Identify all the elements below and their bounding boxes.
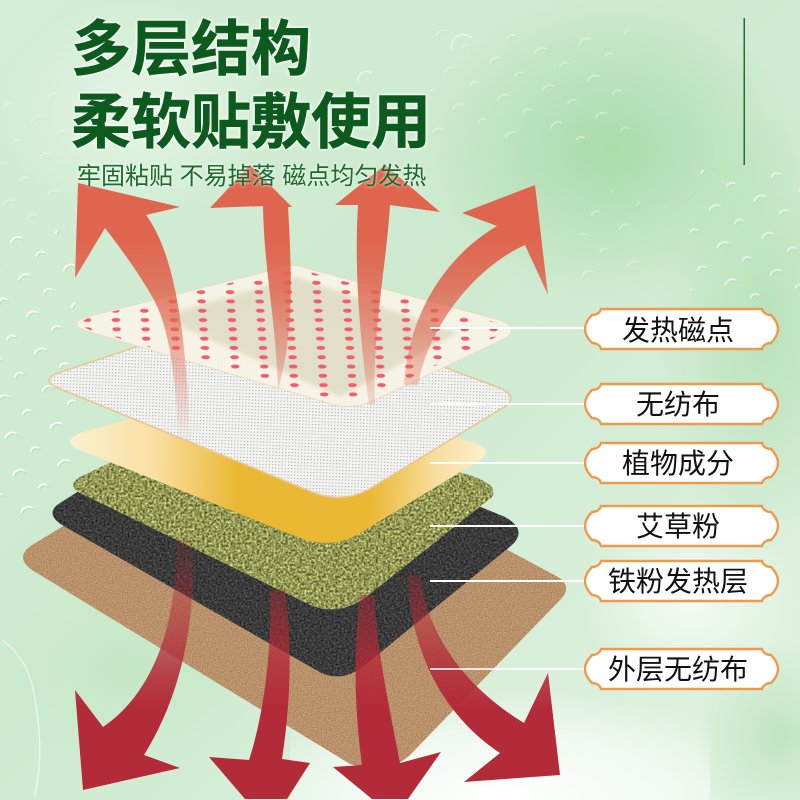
label: mugwort powder — [585, 506, 778, 546]
label: non-woven — [585, 384, 778, 424]
arrow: heat up-left — [75, 183, 190, 440]
leader lines — [430, 327, 586, 670]
title line 2: 柔软贴敷使用 — [71, 89, 431, 156]
layer: plant ingredients (yellow) — [70, 385, 486, 543]
layer: non-woven (white weave) — [49, 300, 511, 498]
arrow: heat up-right — [404, 185, 548, 385]
label: non-woven: 无纺布 — [636, 389, 720, 420]
layer: iron powder (black) — [52, 465, 519, 676]
label: iron heating layer: 铁粉发热层 — [608, 566, 748, 597]
layer: outer non-woven (brown) — [23, 412, 566, 768]
label: plant ingredients: 植物成分 — [622, 448, 734, 479]
label: outer non-woven — [585, 649, 778, 689]
label: plant ingredients — [585, 443, 778, 483]
layer: magnetic heat dots — [76, 266, 512, 407]
label: magnetic dots: 发热磁点 — [622, 315, 734, 346]
subtitle: 牢固粘贴 不易掉落 磁点均匀发热 — [77, 163, 426, 190]
label: iron heating layer — [585, 561, 778, 601]
title line 1: 多层结构 — [71, 16, 311, 83]
label: outer non-woven: 外层无纺布 — [608, 654, 748, 685]
vertical divider — [744, 18, 745, 165]
arrow: heat down centre-left — [209, 590, 310, 799]
arrow: heat up centre-left — [210, 165, 292, 390]
arrow: heat down-right — [408, 575, 560, 782]
arrow: heat up centre-right — [335, 165, 440, 405]
label: mugwort powder: 艾草粉 — [636, 511, 720, 542]
label: magnetic dots — [585, 309, 778, 349]
layer: mugwort powder (green) — [73, 420, 494, 609]
arrow: heat down-left — [75, 540, 193, 790]
arrow: heat down centre-right — [333, 595, 441, 799]
